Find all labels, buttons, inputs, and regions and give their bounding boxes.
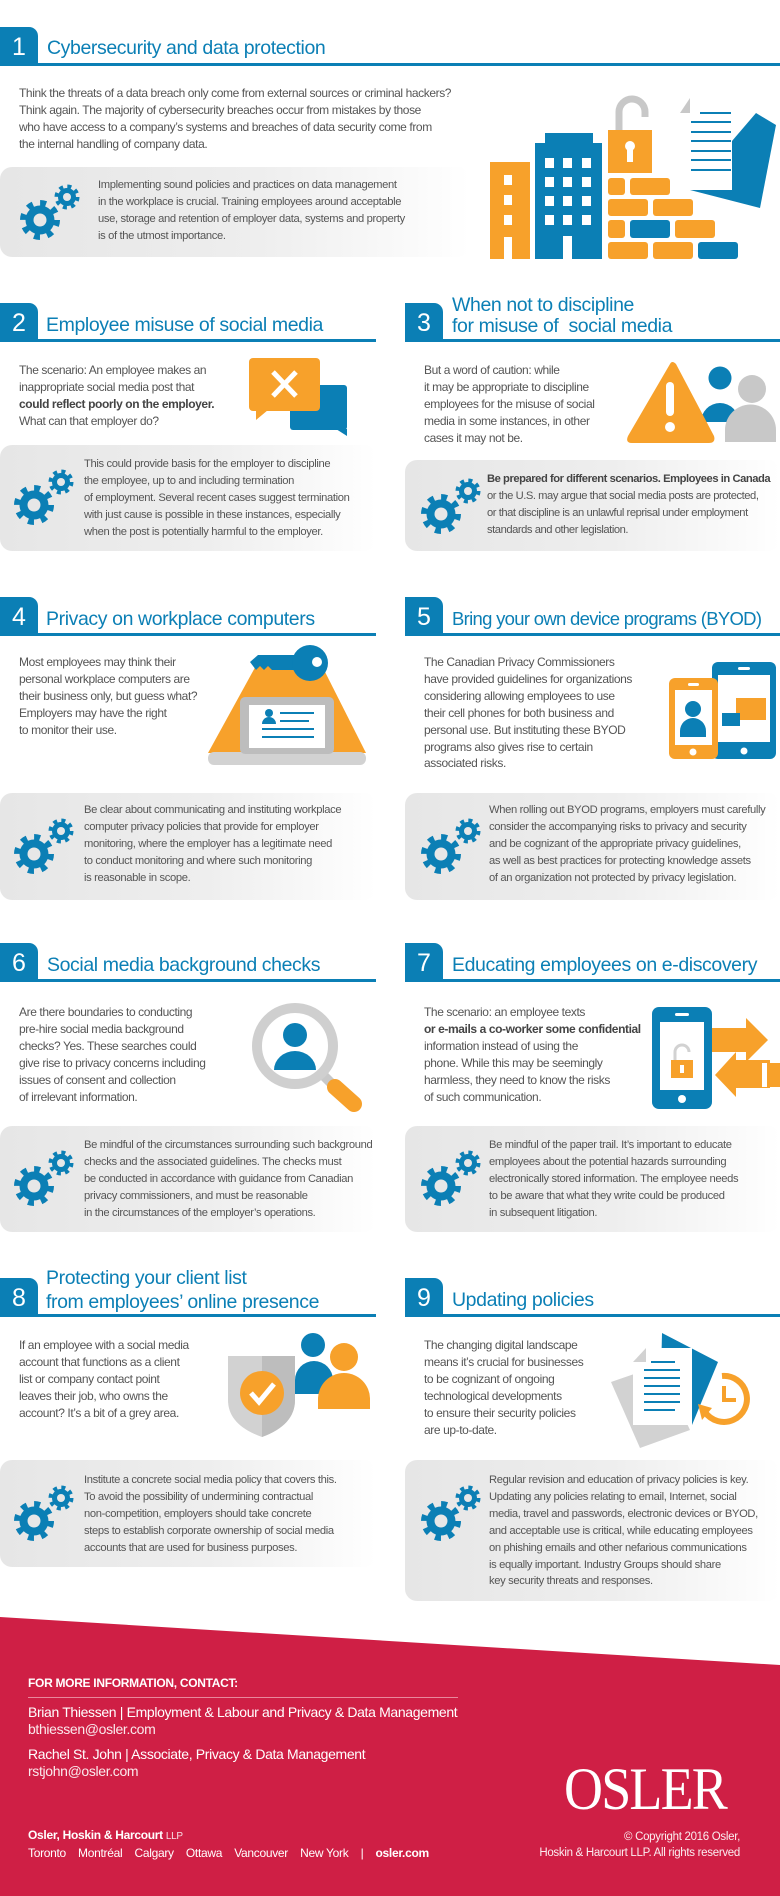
text: when the post is potentially harmful to the employer. — [84, 526, 323, 538]
panel: section 7 tip box — [405, 1126, 780, 1232]
section 6 text: give rise to privacy concerns including — [19, 1056, 206, 1070]
text: Implementing sound policies and practices on data management — [98, 179, 397, 191]
section 8 text: list or company contact point — [19, 1372, 159, 1386]
icon: gears — [20, 184, 80, 240]
section 7 text: harmless, they need to know the risks — [424, 1073, 610, 1087]
section 2 text — [19, 363, 214, 428]
footer: contact panel — [0, 1617, 780, 1896]
section 6 text: pre-hire social media background — [19, 1022, 184, 1036]
section 2 text: could reflect poorly on the employer. — [19, 397, 214, 411]
section 6 text: Are there boundaries to conducting — [19, 1005, 192, 1019]
section 4 header: Privacy on workplace computers — [46, 608, 315, 630]
firm and offices — [28, 1827, 429, 1862]
text: key security threats and responses. — [489, 1575, 653, 1587]
section 8 text: leaves their job, who owns the — [19, 1389, 168, 1403]
section 8 text: account? It’s a bit of a grey area. — [19, 1406, 179, 1420]
section 9 text: technological developments — [424, 1389, 562, 1403]
section 5 header: 5 — [417, 603, 431, 631]
text — [84, 804, 342, 884]
text: This could provide basis for the employer to discipline — [84, 458, 330, 470]
text — [489, 1472, 758, 1590]
section 4 text — [19, 655, 198, 737]
icon: gears — [14, 470, 74, 525]
text: accounts that are used for business purposes. — [84, 1542, 297, 1554]
text: and be cognizant of the appropriate privacy guidelines, — [489, 838, 741, 850]
icon: gears — [421, 1150, 480, 1206]
section 9 text: The changing digital landscape — [424, 1338, 577, 1352]
text: electronically stored information. The employee needs — [489, 1173, 738, 1185]
text: When rolling out BYOD programs, employers must carefully — [489, 804, 765, 816]
text: non-competition, employers should take concrete — [84, 1508, 311, 1520]
panel: section 3 tip box — [405, 460, 780, 551]
section 7 text — [424, 1005, 641, 1104]
text: or that discipline is an unlawful reprisal under employment — [487, 507, 748, 519]
panel: section 8 tip box — [0, 1460, 376, 1567]
section 7 text: or e-mails a co-worker some confidential — [424, 1022, 641, 1036]
text: Be mindful of the circumstances surrounding such background — [84, 1139, 372, 1151]
section 6 header: Social media background checks — [47, 954, 320, 976]
section 3 header — [405, 294, 780, 342]
section 9 header — [405, 1278, 780, 1317]
section 8 header: Protecting your client list — [46, 1267, 247, 1289]
contact: Brian Thiessen — [28, 1704, 457, 1738]
section 2 header: Employee misuse of social media — [46, 314, 323, 336]
text — [489, 1139, 738, 1219]
text: Institute a concrete social media policy that covers this. — [84, 1474, 337, 1486]
section 5 text: their cell phones for both business and — [424, 706, 614, 720]
icon: shield with check and people — [228, 1333, 370, 1437]
section 1 intro text: who have access to a company’s systems and breaches of data security come from — [19, 120, 432, 134]
section 4 text: to monitor their use. — [19, 723, 117, 737]
section 5 text: personal use. But instituting these BYOD — [424, 723, 625, 737]
text: as well as best practices for protecting knowledge assets — [489, 855, 751, 867]
panel: section 6 tip box — [0, 1126, 376, 1232]
section 3 header: 3 — [417, 309, 431, 337]
section 9 header: Updating policies — [452, 1289, 594, 1311]
text: use, storage and retention of employer data, systems and property — [98, 213, 405, 225]
panel: section 5 tip box — [405, 793, 780, 900]
icon: gears — [421, 478, 480, 534]
section 5 text: considering allowing employees to use — [424, 689, 615, 703]
firm and offices: Osler, Hoskin & Harcourt LLP — [28, 1828, 183, 1842]
icon: speech bubbles with X — [249, 358, 347, 436]
text — [84, 1474, 337, 1554]
contact: Rachel St. John: Rachel St. John | Associate, Privacy & Data Management — [28, 1746, 365, 1762]
section 6 header: 6 — [12, 949, 26, 977]
section 3 text: media in some instances, in other — [424, 414, 590, 428]
section 5 text — [424, 655, 632, 770]
section 3 text: But a word of caution: while — [424, 363, 560, 377]
text: to be aware that what they write could be produced — [489, 1190, 725, 1202]
text: Updating any policies relating to email, Internet, social — [489, 1491, 736, 1503]
section 7 header — [405, 943, 780, 982]
section 8 text: If an employee with a social media — [19, 1338, 189, 1352]
section 2 text: What can that employer do? — [19, 414, 159, 428]
section 2 header: 2 — [12, 309, 26, 337]
panel: section 1 tip box — [0, 167, 470, 257]
section 3 header: for misuse of social media — [452, 315, 672, 337]
icon: gears — [421, 1485, 481, 1541]
section 5 text: The Canadian Privacy Commissioners — [424, 655, 614, 669]
section 6 text: issues of consent and collection — [19, 1073, 176, 1087]
copyright: Hoskin & Harcourt LLP. All rights reserved — [539, 1847, 740, 1859]
contact: Brian Thiessen: bthiessen@osler.com — [28, 1721, 155, 1737]
text: on phishing emails and other nefarious communications — [489, 1542, 747, 1554]
icon: gears — [14, 1150, 74, 1206]
text: media, travel and passwords, electronic devices or BYOD, — [489, 1508, 758, 1520]
text: in the circumstances of the employer’s operations. — [84, 1207, 315, 1219]
text: in the workplace is crucial. Training employees around acceptable — [98, 196, 401, 208]
section 3 text: it may be appropriate to discipline — [424, 380, 589, 394]
section 1 header: Cybersecurity and data protection — [47, 37, 325, 59]
icon: phone with lock and arrows — [652, 1007, 780, 1109]
icon: gears — [14, 818, 74, 874]
text: monitoring, where the employer has a legitimate need — [84, 838, 332, 850]
section 7 text: The scenario: an employee texts — [424, 1005, 585, 1019]
contact: Rachel St. John: rstjohn@osler.com — [28, 1763, 138, 1779]
text: consider the accompanying risks to privacy and security — [489, 821, 746, 833]
text: Be mindful of the paper trail. It’s important to educate — [489, 1139, 732, 1151]
contact: Brian Thiessen: Brian Thiessen | Employment & Labour and Privacy & Data Management — [28, 1704, 457, 1720]
text: to conduct monitoring and where such monitoring — [84, 855, 312, 867]
section 1 intro text: Think again. The majority of cybersecurity breaches occur from mistakes by those — [19, 103, 421, 117]
contact: Rachel St. John — [28, 1746, 365, 1780]
section 8 text — [19, 1338, 190, 1420]
section 5 text: associated risks. — [424, 756, 506, 770]
text: of an organization not protected by privacy legislation. — [489, 872, 736, 884]
text: To avoid the possibility of undermining contractual — [84, 1491, 313, 1503]
text: the employee, up to and including termination — [84, 475, 294, 487]
section 4 text: Most employees may think their — [19, 655, 176, 669]
section 3 text: employees for the misuse of social — [424, 397, 594, 411]
icon: two phones — [669, 662, 776, 759]
text: in subsequent litigation. — [489, 1207, 597, 1219]
section 4 text: their business only, but guess what? — [19, 689, 197, 703]
section 9 text: are up-to-date. — [424, 1423, 497, 1437]
section 1 intro text — [19, 86, 451, 151]
section 8 header — [0, 1267, 376, 1317]
text: or the U.S. may argue that social media posts are protected, — [487, 490, 758, 502]
section 6 header — [0, 943, 376, 982]
text: steps to establish corporate ownership of social media — [84, 1525, 334, 1537]
icon: laptop with key — [208, 645, 366, 765]
text: computer privacy policies that provide for employer — [84, 821, 319, 833]
icon: buildings, lock and document — [490, 96, 776, 259]
section 9 text: to be cognizant of ongoing — [424, 1372, 554, 1386]
text: with just cause is possible in these instances, especially — [84, 509, 340, 521]
section 7 text: phone. While this may be seemingly — [424, 1056, 602, 1070]
panel: section 2 tip box — [0, 445, 376, 551]
section 2 text: inappropriate social media post that — [19, 380, 194, 394]
section 7 header: 7 — [417, 949, 431, 977]
section 6 text: checks? Yes. These searches could — [19, 1039, 196, 1053]
section 3 text: cases it may not be. — [424, 431, 523, 445]
text: Be clear about communicating and instituting workplace — [84, 804, 341, 816]
section 1 header — [0, 27, 780, 66]
text: privacy commissioners, and must be reasonable — [84, 1190, 308, 1202]
section 6 text — [19, 1005, 206, 1104]
firm and offices: Toronto Montréal Calgary Ottawa Vancouver New York | osler.com — [28, 1846, 429, 1860]
section 8 header: from employees’ online presence — [46, 1291, 319, 1313]
panel: section 9 tip box — [405, 1460, 780, 1601]
text: is equally important. Industry Groups should share — [489, 1559, 721, 1571]
heading: for more information: FOR MORE INFORMATION, CONTACT: — [28, 1676, 238, 1690]
text: is of the utmost importance. — [98, 230, 226, 242]
section 5 text: programs also gives rise to certain — [424, 740, 593, 754]
section 7 text: of such communication. — [424, 1090, 541, 1104]
section 5 header — [405, 597, 780, 636]
section 7 header: Educating employees on e-discovery — [452, 954, 757, 976]
text: checks and the associated guidelines. The checks must — [84, 1156, 341, 1168]
icon: warning and people — [627, 362, 776, 443]
section 2 text: The scenario: An employee makes an — [19, 363, 206, 377]
text — [98, 179, 406, 242]
section 9 text: to ensure their security policies — [424, 1406, 576, 1420]
section 9 text — [424, 1337, 583, 1438]
section 9 text: means it’s crucial for businesses — [424, 1355, 583, 1369]
section 3 header: When not to discipline — [452, 294, 634, 316]
copyright — [539, 1829, 740, 1861]
panel: section 4 tip box — [0, 793, 376, 900]
section 4 header: 4 — [12, 603, 26, 631]
text: employees about the potential hazards surrounding — [489, 1156, 726, 1168]
text: and acceptable use is critical, while educating employees — [489, 1525, 753, 1537]
text: standards and other legislation. — [487, 524, 628, 536]
text: Be prepared for different scenarios. Employees in Canada — [487, 473, 770, 485]
icon: gears — [421, 818, 480, 874]
section 5 header: Bring your own device programs (BYOD) — [452, 608, 761, 629]
section 4 text: personal workplace computers are — [19, 672, 190, 686]
logo: OSLER: OSLER — [564, 1756, 726, 1822]
section 7 text: information instead of using the — [424, 1039, 578, 1053]
text — [84, 458, 350, 538]
section 6 text: of irrelevant information. — [19, 1090, 137, 1104]
section 1 header: 1 — [12, 33, 26, 61]
icon: gears — [14, 1486, 74, 1541]
section 1 intro text: Think the threats of a data breach only come from external sources or criminal hackers? — [19, 86, 451, 100]
text: Regular revision and education of privacy policies is key. — [489, 1474, 748, 1486]
text — [84, 1139, 372, 1219]
section 3 text — [424, 363, 594, 445]
icon: documents with clock — [606, 1330, 756, 1450]
text: of employment. Several recent cases suggest termination — [84, 492, 350, 504]
text: be conducted in accordance with guidance from Canadian — [84, 1173, 353, 1185]
text — [487, 473, 771, 536]
icon: magnifier with person — [252, 1003, 362, 1112]
text — [489, 804, 766, 884]
section 4 header — [0, 597, 376, 636]
section 5 text: have provided guidelines for organizations — [424, 672, 632, 686]
copyright: © Copyright 2016 Osler, — [624, 1831, 740, 1843]
section 1 intro text: the internal handling of company data. — [19, 137, 207, 151]
section 8 header: 8 — [12, 1284, 26, 1312]
section 8 text: account that functions as a client — [19, 1355, 180, 1369]
section 2 header — [0, 303, 376, 342]
text: is reasonable in scope. — [84, 872, 190, 884]
section 4 text: Employers may have the right — [19, 706, 167, 720]
section 9 header: 9 — [417, 1284, 431, 1312]
